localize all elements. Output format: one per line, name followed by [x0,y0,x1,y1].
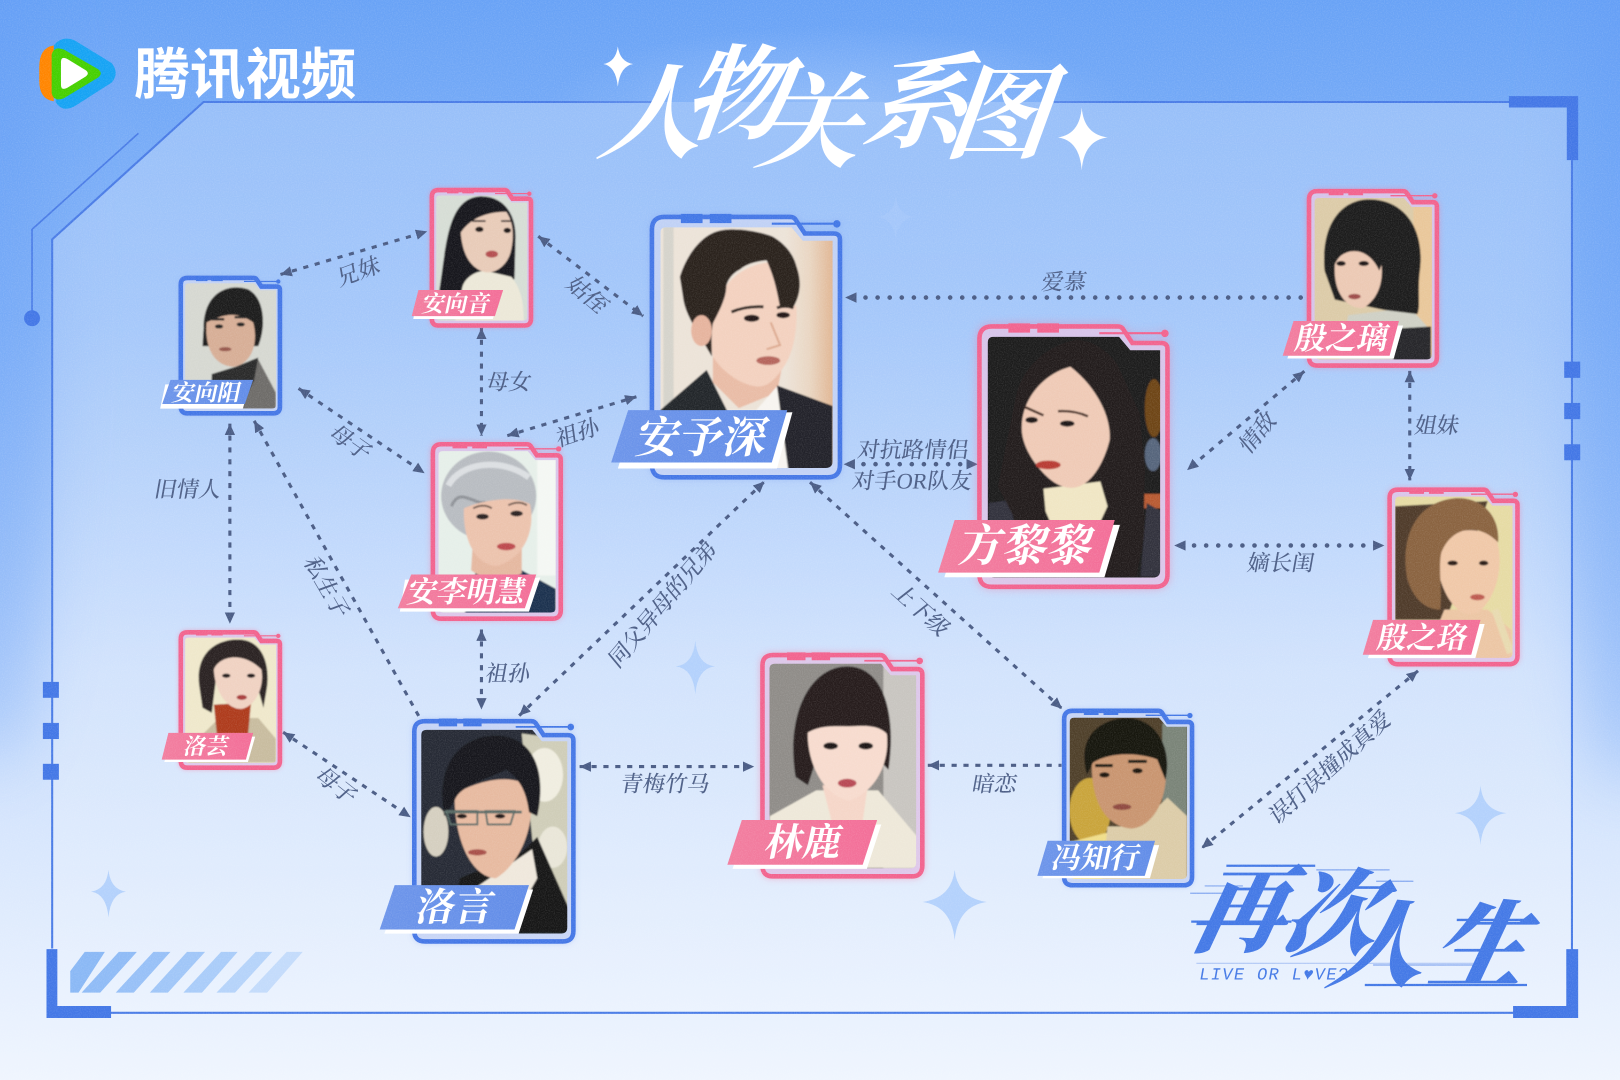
portrait [1395,496,1512,658]
relation: 姑侄 [538,236,643,318]
relation: 误打误撞成真爱: 误打误撞成真爱 [1266,705,1395,830]
name label [380,885,533,934]
tagline: LIVE OR L♥VE? [1197,967,1350,985]
relation: 情敌: 情敌 [1236,406,1280,459]
card: 洛言 [380,719,574,941]
sparkles [91,196,1506,940]
portrait [660,217,834,477]
portrait [421,730,568,934]
card: 安李明慧 [398,442,561,620]
relation: 旧情人: 旧情人 [152,477,223,502]
relation: 对抗路情侣 / 对手OR队友: 对手OR队友 [851,469,974,494]
card: 安向阳 [160,276,280,413]
name label: 冯知行 [1048,842,1144,875]
name label: 安予深 [632,415,772,462]
relation: 姑侄: 姑侄 [561,273,614,318]
logo icon [39,39,116,109]
frame [414,719,574,941]
relation: 母女 [481,328,534,436]
relation: 误打误撞成真爱 [1202,671,1418,848]
name label: 洛言 [412,887,499,929]
portrait [436,196,527,321]
name label: 殷之璃 [1292,322,1392,356]
frame [1390,488,1518,664]
frame [432,188,532,325]
relation: 爱慕 [845,269,1301,303]
card: 冯知行 [1037,709,1193,886]
card: 殷之珞 [1363,488,1518,665]
card: 洛芸 [162,631,280,768]
relation: 暗恋 [928,765,1062,796]
relation: 上下级 [810,482,1062,709]
relation: 对抗路情侣 / 对手OR队友: 对抗路情侣 [856,438,970,463]
name label: 方黎黎 [955,521,1099,571]
relation: 暗恋: 暗恋 [970,772,1020,796]
glitch lines [1190,866,1536,985]
name label [1037,841,1159,878]
logo characters: 再次人生 [1158,860,1577,1000]
name label: 殷之珞 [1374,621,1471,655]
title sparkle left [603,46,633,87]
frame [181,631,280,768]
name label [611,410,792,469]
relation: 母子 洛芸-洛言: 母子 [309,764,363,808]
relation: 同父异母的兄弟: 同父异母的兄弟 [605,535,721,673]
relation: 祖孙 安李明慧-洛言 [481,630,534,709]
title: 人物关系图 [584,40,1086,182]
card: 殷之璃 [1283,189,1437,367]
frame [181,276,280,413]
title sparkle right [1058,107,1108,170]
portrait [185,638,276,763]
portrait [1064,711,1192,886]
relation: 情敌 [1187,371,1304,470]
card: 林鹿 [727,652,923,876]
relation: 爱慕: 爱慕 [1040,269,1088,294]
name label: 安李明慧 [404,576,530,609]
portrait [185,283,276,408]
name label [938,520,1120,577]
relation: 祖孙 安李明慧-安予深: 祖孙 [555,413,602,452]
name label [727,820,881,869]
relation: 私生子 [254,421,419,717]
portrait [438,451,556,612]
relation: 私生子: 私生子 [298,554,355,620]
portrait [762,655,923,876]
relation: 祖孙 安李明慧-洛言: 祖孙 [484,661,534,686]
relation: 上下级: 上下级 [886,580,956,640]
logo wordmark: 腾讯视频 [134,43,356,106]
relation: 母子 洛芸-洛言 [283,732,411,817]
relation: 母子 安向阳-安李明慧 [299,388,425,473]
relation: 姐妹 [1410,371,1461,480]
logo: Tencent Video [39,39,356,109]
relation: 青梅竹马: 青梅竹马 [619,772,712,796]
relation: 同父异母的兄弟 [519,481,765,716]
frame [1309,189,1437,366]
card: 安予深 [611,214,841,477]
frame [979,323,1169,587]
title glow [548,26,1126,191]
relation: 姐妹: 姐妹 [1413,413,1461,438]
name label: 安向音 [420,292,493,316]
name label [1363,620,1485,658]
frame [652,214,841,477]
relation: 兄妹: 兄妹 [336,252,382,292]
frame [433,442,561,619]
relation: 对抗路情侣 / 对手OR队友 [844,438,978,494]
relation: 嫡长闺: 嫡长闺 [1245,550,1316,575]
show logo: 再次人生 [1158,860,1577,1000]
portrait [988,336,1160,578]
portrait [1314,198,1432,360]
inner panel [52,102,1572,1013]
relation: 祖孙 安李明慧-安予深 [507,397,636,452]
name label: 林鹿 [761,822,846,864]
decorative stripes [70,952,303,993]
name label: 安向阳 [170,381,243,405]
frame [1064,709,1193,885]
name label: 洛芸 [182,734,232,759]
frame [762,652,923,876]
card: 方黎黎 [938,323,1169,587]
relation: 嫡长闺 [1174,540,1384,575]
relation: 母女: 母女 [485,370,534,394]
relation: 母子 安向阳-安李明慧: 母子 [324,421,378,464]
relation: 兄妹 [281,231,427,292]
card: 安向音 [412,188,532,325]
